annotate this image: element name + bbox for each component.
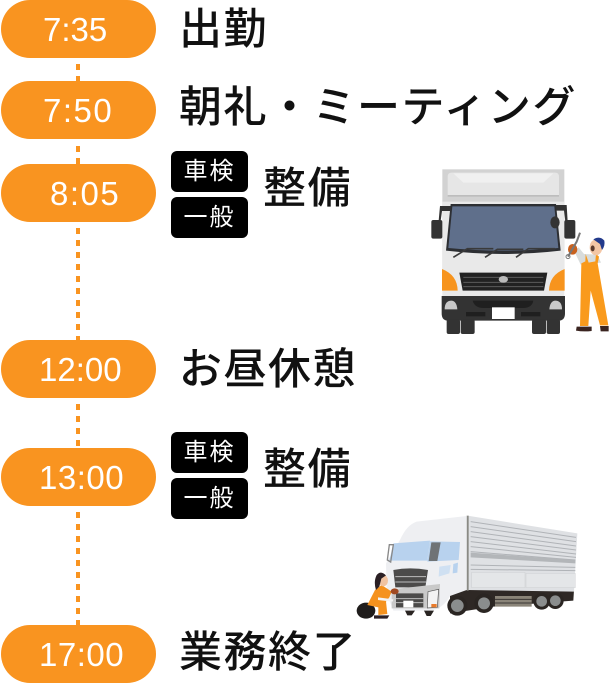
wheels [447,592,564,616]
tag: general: 一般 [184,204,236,231]
time pill 17:00 [1,625,156,683]
tag: vehicle inspection [171,432,248,473]
heading: lunch break: お昼休憩 [179,346,357,394]
heading: end of work: 業務終了 [179,629,357,677]
tag: general [171,197,248,238]
truck cab [386,516,467,616]
tag: vehicle inspection [171,151,248,192]
illustration: side view truck with mechanic [356,516,578,619]
illustration: front view truck with mechanic [431,169,609,334]
time pill 7:50 [1,81,156,139]
timeline connector: 8:05 to 12:00 [76,228,80,340]
trailer box [467,516,577,592]
time pill 7:35: 7:35 [43,11,107,48]
truck cargo box [442,169,564,276]
truck cab [431,202,575,334]
time pill 17:00: 17:00 [39,636,124,673]
time pill 12:00: 12:00 [39,351,122,388]
time pill 8:05: 8:05 [50,175,120,212]
tag: general: 一般 [184,485,236,512]
heading: maintenance: 整備 [263,446,352,494]
tag: vehicle inspection: 車検 [184,158,236,185]
time pill 7:35 [1,0,156,58]
heading: morning meeting: 朝礼・ミーティング [179,84,577,132]
mechanic with tyre [357,573,399,619]
chassis [450,590,574,613]
timeline connector: 7:35 to 7:50 [76,64,80,81]
time pill 13:00 [1,448,156,506]
time pill 8:05 [1,164,156,222]
heading: arrival: 出勤 [179,6,268,54]
time pill 12:00 [1,340,156,398]
time pill 13:00: 13:00 [39,459,124,496]
mechanic [566,233,609,331]
timeline connector: 7:50 to 8:05 [76,146,80,164]
heading: maintenance: 整備 [263,165,352,213]
timeline connector: 13:00 to 17:00 [76,512,80,625]
tag: general [171,478,248,519]
time pill 7:50: 7:50 [43,92,113,129]
timeline connector: 12:00 to 13:00 [76,404,80,448]
tag: vehicle inspection: 車検 [184,439,236,466]
